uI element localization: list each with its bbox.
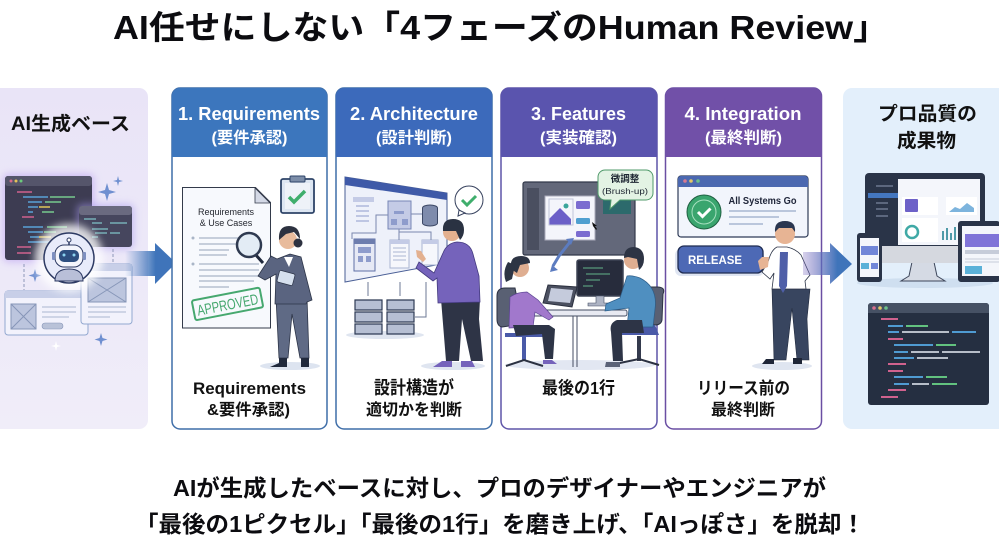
- callout: brush-up: [598, 170, 653, 209]
- text: bottom summary: 「最後の1ピクセル」「最後の1行」を磨き上げ、「AIっぽさ」を脱却！: [135, 511, 865, 537]
- panel: phase 2 architecture: (設計判断): [376, 129, 452, 147]
- heading: AI base: AI生成ベース: [11, 112, 130, 135]
- panel: phase 1 requirements: (要件承認): [212, 129, 288, 147]
- illustration: status window: All Systems Go: [728, 196, 796, 207]
- panel: phase 1 requirements: [172, 88, 327, 429]
- panel: phase 3 features: (実装確認): [540, 128, 617, 147]
- panel: phase 4 integration: [666, 88, 822, 429]
- panel: phase 3 features: [497, 88, 664, 429]
- heading: phase 3: 3. Features: [531, 103, 626, 124]
- text: bottom summary: AIが生成したベースに対し、プロのデザイナーやエンジニアが: [173, 475, 826, 501]
- illustration: desk with two developers: [497, 247, 664, 370]
- panel: phase 4 integration: 最終判断: [711, 401, 775, 419]
- illustration: approved document: Requirements: [198, 207, 255, 217]
- illustration: architecture board: [345, 177, 447, 282]
- panel: pro quality deliverable: 成果物: [897, 129, 956, 152]
- panel: phase 2 architecture: [336, 88, 492, 429]
- illustration: reviewer with magnifier: [237, 226, 320, 370]
- text: phase 2 caption: 設計構造が: [374, 377, 454, 398]
- illustration: approved document: [182, 188, 270, 328]
- panel: phase 4 integration: (最終判断): [705, 129, 782, 147]
- illustration: devices: [857, 173, 999, 288]
- heading: phase 4: 4. Integration: [684, 103, 802, 124]
- illustration: design monitor: [523, 182, 635, 272]
- button: release: [675, 246, 764, 276]
- arrow: base to phase 1: [125, 243, 176, 284]
- text: phase 3 caption: 最後の1行: [542, 378, 615, 398]
- text: phase 4 caption: リリース前の: [697, 379, 790, 398]
- icon: approval speech bubble: [455, 186, 483, 216]
- heading: phase 1: 1. Requirements: [178, 103, 320, 124]
- illustration: status window: [678, 176, 808, 237]
- icon: wireframe page right: [81, 264, 132, 324]
- button: release: RELEASE: [688, 253, 742, 267]
- icon: wireframe page left: [5, 291, 88, 335]
- callout: brush-up: (Brush-up): [602, 187, 648, 196]
- heading: deliverable: プロ品質の: [878, 103, 977, 125]
- text: bottom summary: [135, 475, 865, 537]
- illustration: engineer in hoodie: [416, 219, 485, 370]
- icon: sparkles: [28, 176, 123, 351]
- illustration: server racks: [346, 282, 426, 339]
- illustration: approved document: & Use Cases: [200, 218, 253, 228]
- icon: large code window: [3, 174, 94, 262]
- text: phase 1 caption: Requirements: [193, 379, 306, 398]
- callout: brush-up: 微調整: [611, 173, 640, 185]
- icon: AI robot: [35, 224, 103, 292]
- icon: clipboard check: [281, 176, 314, 213]
- illustration: approved document: APPROVED: [196, 291, 260, 320]
- icon: small code window: [77, 204, 134, 249]
- panel: phase 2 architecture: 適切かを判断: [366, 400, 462, 419]
- illustration: manager thumbs up: [752, 221, 812, 370]
- illustration: clean code window: [868, 303, 989, 405]
- heading: phase 2: 2. Architecture: [350, 103, 478, 124]
- panel: pro quality deliverable: [843, 88, 999, 429]
- panel: AI base: [0, 88, 148, 429]
- panel: phase 1 requirements: &要件承認): [207, 401, 290, 419]
- title: AI任せにしない「4フェーズのHuman Review」: [113, 9, 889, 46]
- arrow: phase 4 to deliverable: [803, 243, 852, 284]
